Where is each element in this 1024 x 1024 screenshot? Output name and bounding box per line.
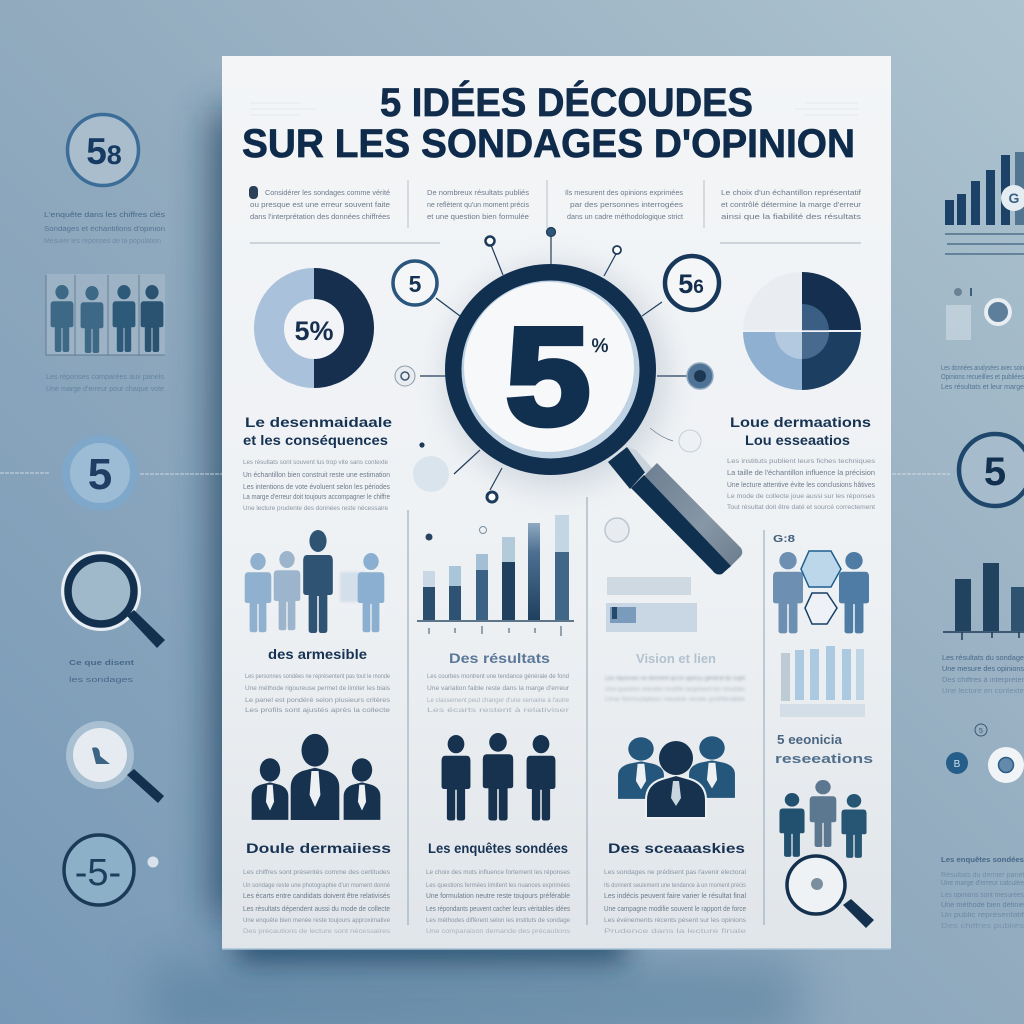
text block: bottom right: Un public représentatif [941,912,1024,919]
text block: faded lines: Les réponses ne donnent qu'un aperçu général du sujet [605,675,745,682]
text block: faded lines: Une question orientée modifie largement les résultats [605,686,746,693]
bar chart: main [417,515,574,636]
text block: bottom third lines: Les événements récents pèsent sur les opinions [604,917,747,924]
text block: chart lines: Les écarts restent à relativiser [427,707,570,714]
icon: white dot [988,747,1024,783]
text block: left section lines: La marge d'erreur doit toujours accompagner le chiffre [243,492,390,501]
icon: dark dot [946,752,968,774]
text block: people lines [245,673,391,714]
text block: right lines: Le mode de collecte joue aussi sur les réponses [727,493,876,500]
icon: dark dot: B [954,759,961,770]
icon: small magnifier [787,856,874,928]
text block: left intro: L'enquête dans les chiffres clés [44,212,166,219]
text block: chart lines: Le classement peut changer d'une semaine à l'autre [427,697,569,704]
text block: chart lines [427,673,570,714]
heading: chart: Des résultats [449,650,550,666]
separators [408,497,764,925]
heading: left section: Le desenmaidaale [245,414,392,430]
icon: 5 ring right: 5 [984,450,1006,494]
text block: bottom third lines: Prudence dans la lecture finale [604,928,747,935]
text block: bottom third lines: Les indécis peuvent faire varier le résultat final [604,891,746,900]
text block: faded lines: Une formulation neutre reste préférable [605,696,745,703]
text block: people lines: Une méthode rigoureuse permet de limiter les biais [245,685,391,692]
icon: main magnifier with 5% [444,264,742,574]
text block: intro columns: Le choix d'un échantillon représentatif [721,188,862,197]
heading: faded: Vision et lien [636,651,716,666]
icon: overlapping suited group [618,736,735,818]
pie chart: left: 5% [294,316,334,346]
text block: right greek: Les résultats et leur marge [941,384,1024,391]
text block: intro columns: et contrôlé détermine la marge d'erreur [721,200,862,209]
decorative line: left [0,473,222,474]
column: bottom second [426,733,571,935]
text block: intro columns: De nombreux résultats publiés [427,188,529,197]
heading: people: des armesible [268,646,367,662]
text block: people lines: Les profils sont ajustés après la collecte [245,707,390,714]
text block: intro columns: ne reflètent qu'un moment précis [427,200,529,209]
text block: bottom third lines: Ils donnent seulement une tendance à un moment précis [604,882,747,889]
icon: small outlined dot: 5 [979,728,983,735]
panel: four people [46,274,165,355]
text block: chart lines: Une variation faible reste dans la marge d'erreur [427,685,570,692]
icon: small outlined dot [975,724,987,736]
text block: left intro [44,212,166,245]
column: bottom third [604,736,747,935]
text block: left section lines: Un échantillon bien construit reste une estimation [243,470,390,479]
bar chart: top right: G [1009,190,1020,206]
icon: left circle 5 [393,261,437,305]
text block: bottom right: Des chiffres publiés [941,923,1024,930]
heading: right sub [775,732,873,766]
text block: bottom left lines: Les écarts entre candidats doivent être relativisés [243,891,390,900]
title [242,80,855,166]
heading: left section [243,414,392,448]
text block: chart lines: Les courbes montrent une tendance générale de fond [427,673,569,680]
icon: ring with dash 5: -5- [75,852,121,894]
text block: bottom second lines: Une formulation neutre reste toujours préférable [426,891,570,900]
text block: right lines: Les instituts publient leurs fiches techniques [727,458,876,465]
icon: small dot [148,856,158,868]
heading: right: Lou esseaatios [745,432,850,448]
text block: right lines: Une lecture attentive évite les conclusions hâtives [727,480,875,489]
text block: lower right: Les résultats du sondage [942,655,1024,662]
text block: bottom left lines: Des précautions de lecture sont nécessaires [243,928,391,935]
text block: left intro: Sondages et échantillons d'opinion [44,226,165,233]
text block: magnifier caption [69,660,135,684]
big number 5: 5 [506,299,590,453]
text block: bottom left lines: Une enquête bien menée reste toujours approximative [243,917,390,924]
text block: magnifier caption: Ce que disent [69,660,135,667]
text block: bottom second lines: Les répondants peuvent cacher leurs véritables idées [426,904,570,913]
text block: bottom third lines: Une campagne modifie souvent le rapport de force [604,904,746,913]
panel: right section [727,414,876,928]
text block: left section lines: Les résultats sont souvent lus trop vite sans contexte [243,459,388,466]
text block: intro columns: Ils mesurent des opinions exprimées [565,188,683,197]
panel: faded centre section [605,577,746,703]
text block: left faded [46,374,165,393]
text block: right lines: La taille de l'échantillon influence la précision [727,468,875,477]
text block: bottom left lines [243,869,391,935]
connector lines and dots [420,228,687,502]
icon: two people with hexagons [773,551,869,633]
icon: magnifier [61,551,165,648]
text block: bottom left lines: Un sondage reste une photographie d'un moment donné [243,882,390,889]
icon: small label: G:8 [773,534,796,545]
text block: left section lines: Les intentions de vote évoluent selon les périodes [243,482,390,491]
text block: right greek [941,365,1024,391]
text block: intro columns: et une question bien formulée [427,212,529,221]
text block: intro columns: ou presque est une erreur souvent faite [250,200,390,209]
text block: bottom third lines: Les sondages ne prédisent pas l'avenir électoral [604,869,747,876]
text block: bottom second lines: Les questions fermées limitent les nuances exprimées [426,882,571,889]
text block: bottom second lines [426,869,571,935]
text block: intro columns: dans un cadre méthodologique strict [567,212,684,221]
text block: left faded: Une marge d'erreur pour chaque vote [46,386,164,393]
pie chart: right [743,272,861,390]
text block: people lines: Les personnes sondées ne représentent pas tout le monde [245,673,390,680]
icon: left circle 5: 5 [409,271,422,297]
pie chart: left [254,268,374,388]
text block: left intro: Mesurer les réponses de la population [44,238,161,245]
text block: intro columns: par des personnes interrogées [570,200,683,209]
text block: bottom left lines: Les résultats dépendent aussi du mode de collecte [243,904,390,913]
text block: intro columns: ainsi que la fiabilité des résultats [721,212,861,221]
text block: intro columns [249,186,862,221]
percent sign: % [592,336,609,357]
text block: left faded: Les réponses comparées aux panels [46,374,165,381]
text block: bottom second lines: Les méthodes diffèrent selon les instituts de sondage [426,917,570,924]
text block: bottom right: Résultats du dernier panel [941,872,1024,879]
icon: group of four people [245,530,384,633]
text block: right lines [727,458,876,511]
icon: small side dots [395,363,713,542]
text block: lower right: Une mesure des opinions [942,666,1024,673]
text block: bottom right: Les enquêtes sondées [941,857,1024,864]
text block: faded lines [605,675,746,703]
decorative line: right [892,473,950,475]
text block: lower right: Des chiffres à interpréter [942,677,1024,684]
heading: bottom third: Des sceaaaskies [608,840,745,856]
text block: lower right: Une lecture en contexte [942,688,1024,695]
bar chart: top right [945,152,1024,254]
text block: left section lines: Une lecture prudente des données reste nécessaire [243,505,388,512]
heading: right sub: 5 eeonicia [777,732,843,747]
bar chart: lower right [943,563,1024,640]
icon: pale magnifier [66,721,164,803]
heading: right [730,414,871,448]
text block: intro columns: dans l'interprétation des données chiffrées [250,212,390,221]
right sidebar [892,152,1024,930]
icon: right circle 5%: 56 [678,269,704,299]
text block: bottom second lines: Une comparaison demande des précautions [426,928,571,935]
column: bottom left [243,734,391,935]
title: 5 IDÉES DÉCOUDES [380,80,753,125]
heading: bottom second: Les enquêtes sondées [428,840,568,856]
panel: left middle section [243,414,392,714]
heading: bottom left: Doule dermaiiess [246,840,391,856]
heading: right sub: reseeations [775,751,873,766]
heading: left section: et les conséquences [243,432,388,448]
text block: bottom right [941,857,1024,930]
icon: 5% ring [68,114,138,186]
heading: right: Loue dermaations [730,414,871,430]
text block: bottom third lines [604,869,747,935]
text block: bottom left lines: Les chiffres sont présentés comme des certitudes [243,869,391,876]
icon: 5 pale ring: 5 [88,450,112,499]
text block: right lines: Tout résultat doit être daté et sourcé correctement [727,504,875,511]
icon: 5% ring: 58 [86,131,122,172]
text block: intro columns: Considérer les sondages comme vérité [265,188,390,197]
icon: 5 ring right [959,434,1024,506]
text block: bottom right: Une méthode bien définie [941,902,1024,909]
icon: ring with dash 5 [64,835,134,905]
icon: 5 pale ring [66,439,134,507]
magnifier handle [608,447,742,574]
text block: lower right [942,655,1024,695]
title: SUR LES SONDAGES D'OPINION [242,122,855,166]
icon: three small people [779,780,867,858]
icon: three standing people [442,733,555,821]
left sidebar [0,114,222,905]
text block: left section lines [243,459,390,512]
icon: three suited people left [252,734,380,820]
text block: bottom second lines: Le choix des mots influence fortement les réponses [426,869,571,876]
icon: right circle 5% [665,256,719,310]
text block: magnifier caption: les sondages [69,677,134,684]
icon: faded dashboard [946,288,1010,340]
bar chart: pale [780,646,865,717]
text block: people lines: Le panel est pondéré selon plusieurs critères [245,697,391,704]
panel: main poster [222,56,891,949]
panel: middle chart section [417,515,574,714]
